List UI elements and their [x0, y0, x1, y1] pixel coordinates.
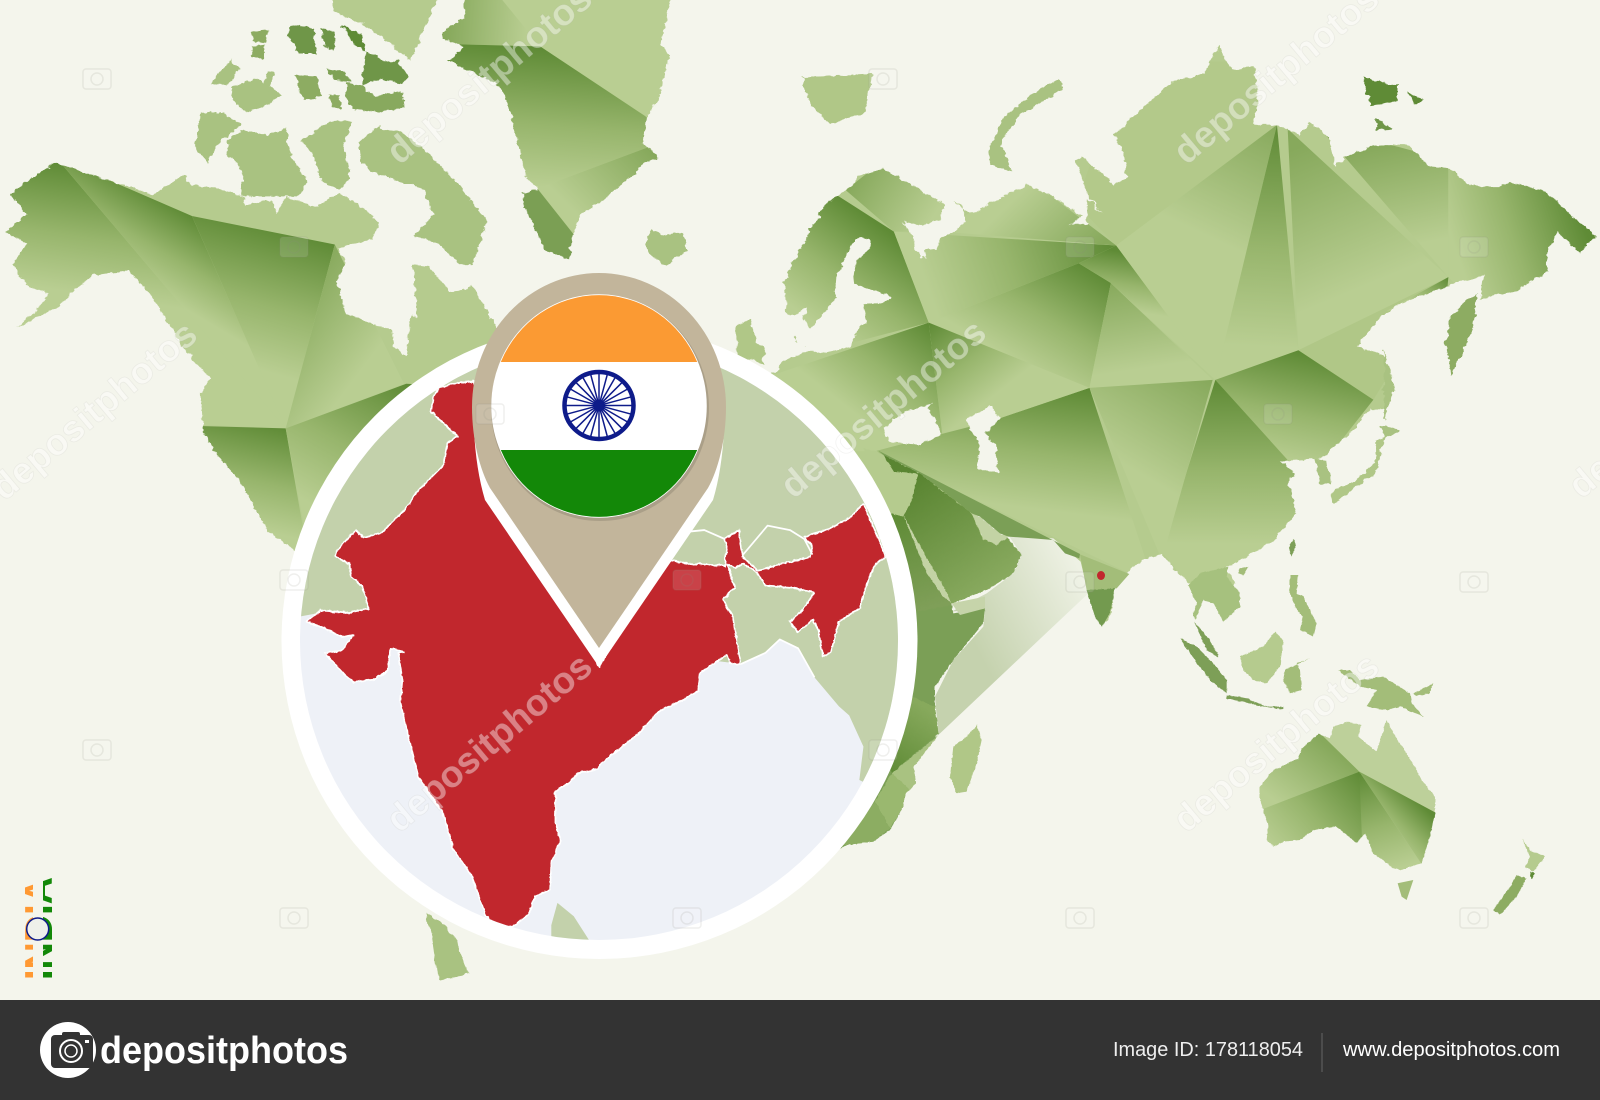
United Kingdom: [732, 316, 765, 362]
pin body: [472, 273, 726, 648]
Iceland: [645, 228, 687, 266]
watermark cameras: [83, 69, 1488, 928]
North America mainland: [5, 162, 496, 551]
image id: Image ID: 178118054: [1113, 1039, 1303, 1061]
footer bar: [0, 1000, 1600, 1100]
India vertical label: [18, 877, 61, 980]
website: www.depositphotos.com: [1342, 1039, 1560, 1061]
Ashoka chakra: [564, 372, 634, 439]
flag of India: [491, 295, 709, 521]
location pin: [472, 273, 726, 667]
green band: [501, 450, 697, 517]
location dot: [1097, 571, 1105, 580]
footer logo icon: [40, 1022, 96, 1078]
Southeast Asia and Oceania: [1180, 538, 1545, 915]
orange band: [501, 295, 697, 362]
Tasmania: [1398, 880, 1413, 900]
highlight cone: [935, 535, 1088, 735]
pin white outline: [474, 430, 724, 667]
Indonesia and Philippines: [1180, 538, 1433, 717]
white ring: [282, 323, 918, 959]
Madagascar: [950, 725, 982, 793]
Gulf of Aden: [952, 597, 985, 615]
magnifier circle: [282, 344, 918, 959]
watermarks: [0, 0, 1600, 840]
white band: [492, 295, 706, 517]
Nepal and Bhutan borders: [691, 524, 816, 678]
South America tip: [427, 913, 469, 980]
flag shadow ring: [491, 295, 709, 521]
footer logo text: depositphotos: [100, 1030, 348, 1072]
neighbouring land: [301, 368, 898, 940]
Levant and Turkey: [863, 448, 918, 508]
watermarks: depositphotos: [772, 311, 994, 506]
Indochina and Malay peninsula: [1188, 567, 1240, 657]
Persian Gulf: [972, 513, 1008, 545]
Canadian Arctic islands: [194, 0, 487, 264]
Australia: [1260, 720, 1436, 870]
Asian and Arctic islands: [803, 73, 1478, 504]
peninsular India: [1087, 588, 1115, 627]
Arabian peninsula: [883, 455, 1022, 603]
watermarks: depositphotos: [378, 645, 600, 840]
label wheel: [27, 918, 49, 940]
Black Sea and Caspian Sea: [883, 404, 1001, 473]
Red Sea: [903, 515, 952, 603]
southern Pakistan and India strip: [1080, 554, 1129, 590]
Greenland: [442, 0, 671, 260]
Eurasia mainland: [770, 45, 1597, 626]
Africa: [807, 497, 985, 863]
New Zealand: [1493, 838, 1545, 915]
Sri Lanka: [551, 903, 589, 940]
label text: INDIA: [18, 877, 61, 980]
sea: [300, 342, 898, 940]
Iran coast strip: [878, 451, 1080, 558]
watermarks: depositphotos: [1165, 645, 1387, 840]
Baltic and White Sea: [790, 203, 955, 353]
map of India: [307, 381, 886, 927]
Arabia, Africa and highlight cone: [807, 448, 1129, 863]
